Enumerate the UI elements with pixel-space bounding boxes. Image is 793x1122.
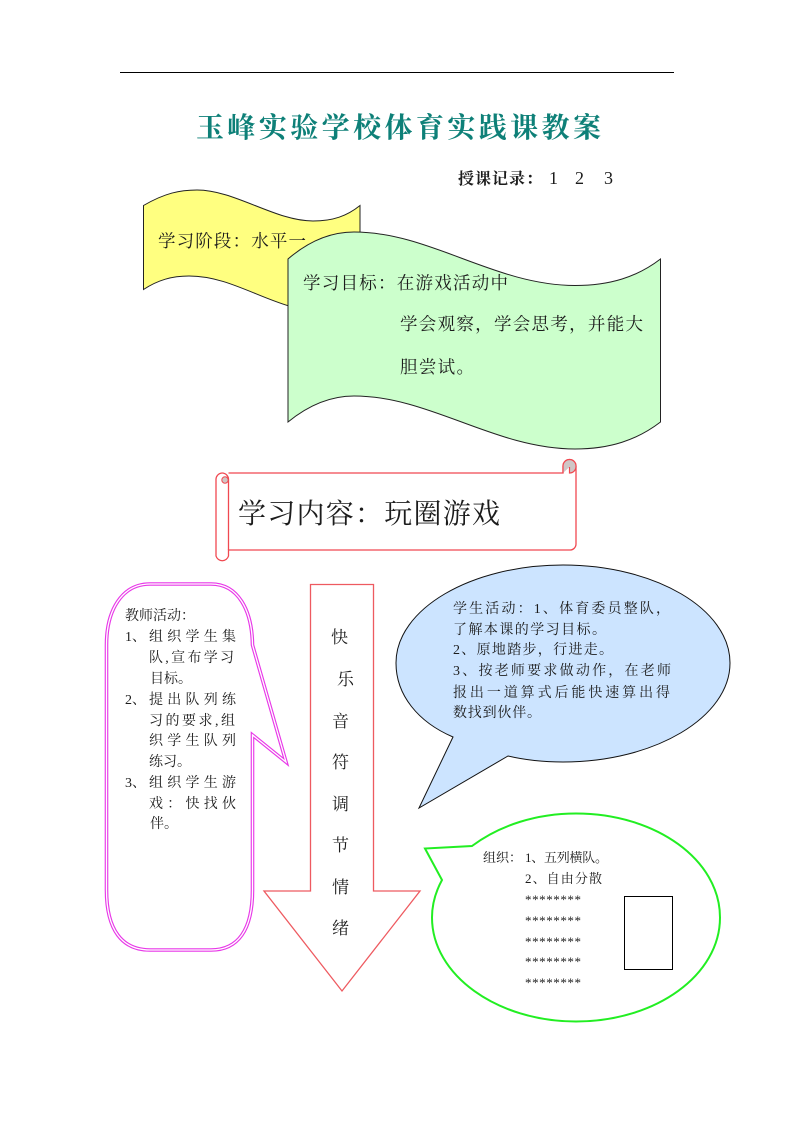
panel: teacher activity callout: 3、 [125,776,146,791]
panel: student activity speech bubble: 2、原地踏步，行进走。 [453,641,613,658]
panel: organisation speech bubble: ******** [525,975,581,990]
panel: teacher activity callout: 习的要求,组 [149,712,235,729]
panel: learning goal flag: 学会观察，学会思考，并能大 [400,314,643,334]
panel: teacher activity callout [106,584,286,950]
panel: organisation speech bubble [425,814,720,1022]
panel: teacher activity callout: 队,宣布学习 [149,650,234,666]
panel: learning stage flag: 学习阶段：水平一 [158,231,306,251]
arrow: down arrow with text: 调 [332,795,349,814]
panel: student activity speech bubble: 数找到伙伴。 [453,704,541,721]
panel: teacher activity callout: 伴。 [150,816,178,832]
panel: organisation speech bubble: ******** [525,934,581,949]
panel: student activity speech bubble: 学生活动：1、体育委员整队， [453,600,670,617]
arrow: down arrow with text: 符 [332,753,349,772]
panel: teacher activity callout: 织学生队列 [149,732,236,749]
arrow: down arrow with text: 乐 [337,670,355,689]
panel: teacher activity callout: 教师活动： [125,607,195,624]
teaching record line: 2 [575,168,584,188]
panel: learning goal flag: 学习目标：在游戏活动中 [303,273,508,293]
panel: learning goal flag [288,232,660,449]
panel: teacher activity callout: 提出队列练 [149,691,237,708]
arrow: down arrow with text [264,584,420,991]
panel: learning content scroll [216,460,576,561]
panel: organisation speech bubble: ******** [525,954,581,969]
teaching record line [458,168,613,188]
panel: learning content scroll: 学习内容：玩圈游戏 [238,498,500,530]
teaching record line: 1 [549,168,558,188]
teaching record line: 授课记录： [458,169,542,188]
panel: teacher activity callout: 组织学生集 [149,628,236,645]
panel: organisation speech bubble: 2、自由分散 [525,871,602,886]
panel: student activity speech bubble: 报出一道算式后能快速算出得 [453,684,670,701]
panel: organisation speech bubble: ******** [525,913,581,928]
panel: student activity speech bubble [396,565,730,808]
panel: student activity speech bubble: 了解本课的学习目标。 [453,621,606,638]
panel: teacher activity callout: 目标。 [150,670,192,687]
panel: teacher activity callout: 1、 [125,630,146,645]
title: 玉峰实验学校体育实践课教案 [196,111,601,144]
arrow: down arrow with text: 情 [332,878,349,897]
panel: learning stage flag [144,190,360,320]
arrow: down arrow with text: 音 [332,712,349,731]
panel: teacher activity callout: 戏：快找伙 [149,795,236,812]
panel: organisation speech bubble: 组织： [483,850,522,865]
arrow: down arrow with text: 节 [332,836,349,855]
panel: student activity speech bubble: 3、按老师要求做动作，在老师 [453,662,671,679]
panel: teacher activity callout: 2、 [125,693,146,708]
panel: organisation speech bubble: 1、五列横队。 [525,850,608,865]
arrow: down arrow with text: 绪 [332,919,349,938]
teaching record line: 3 [604,168,613,188]
panel: teacher activity callout: 练习。 [149,754,191,770]
panel: teacher activity callout: 组织学生游 [149,774,236,791]
arrow: down arrow with text: 快 [331,628,348,647]
panel: organisation speech bubble: ******** [525,892,581,907]
panel: learning goal flag: 胆尝试。 [400,357,474,377]
formation rectangle [624,896,672,970]
